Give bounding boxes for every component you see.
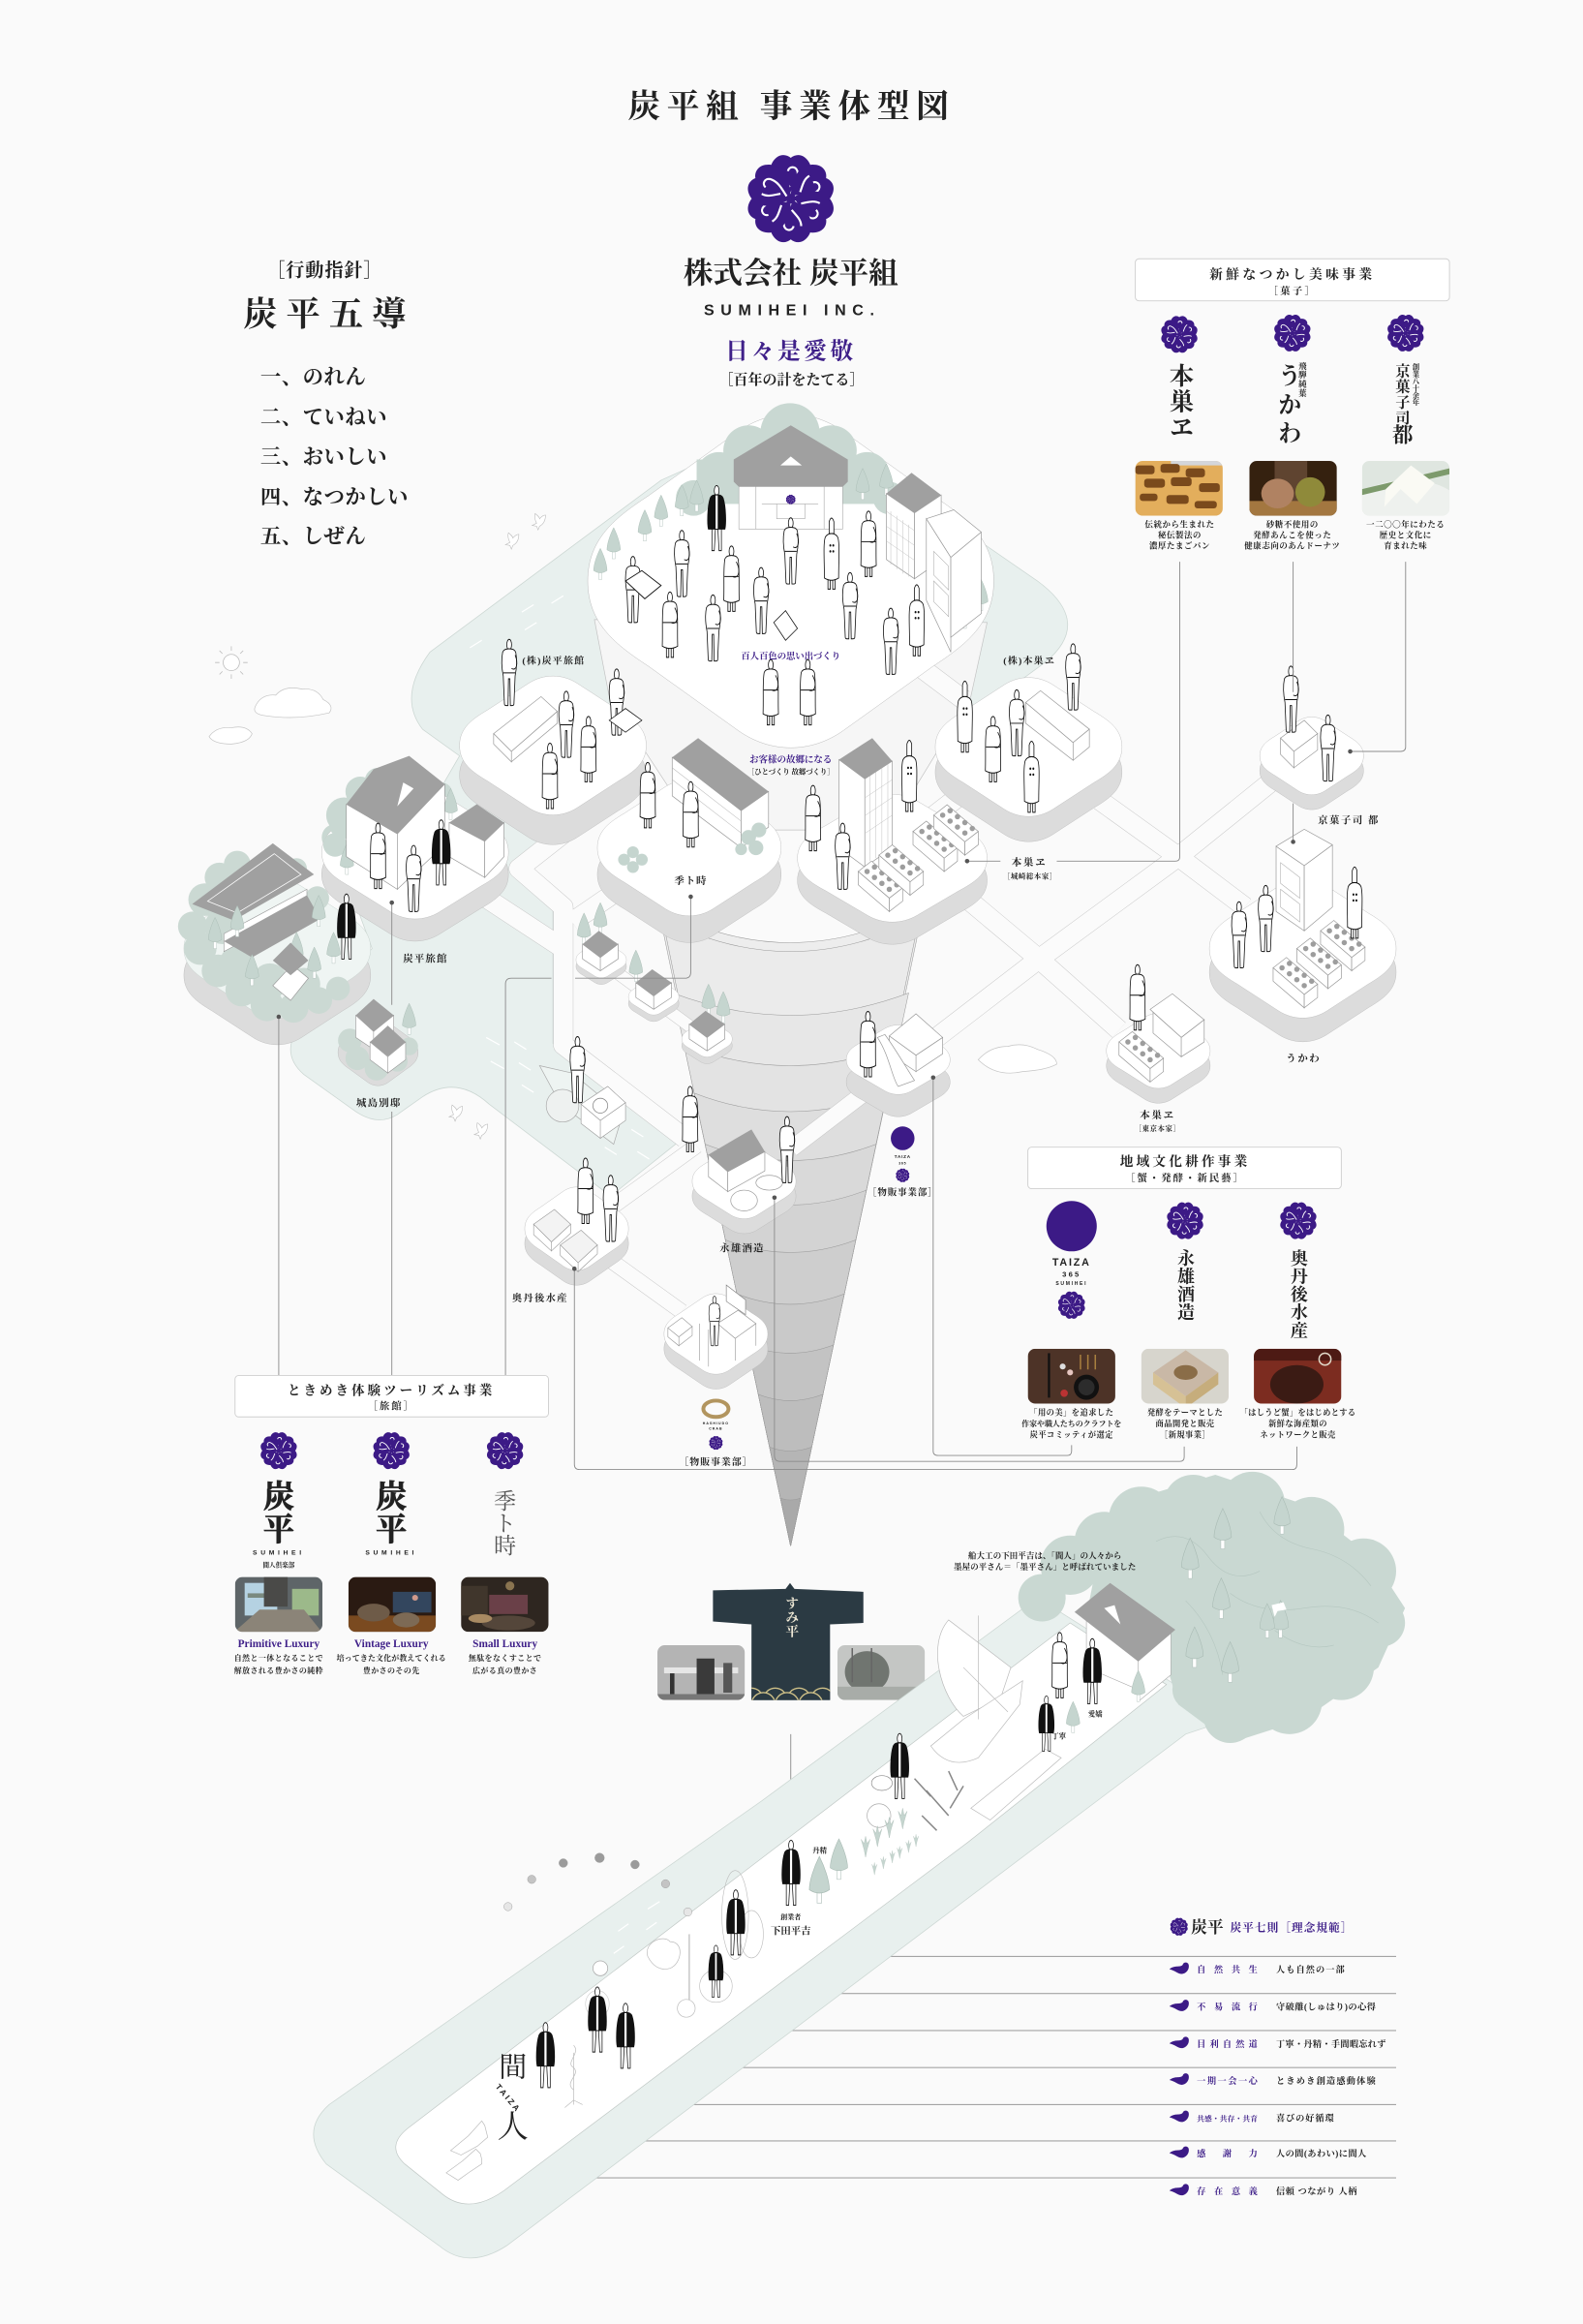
brands: tourism: 平: [263, 1512, 294, 1546]
principle rows: ときめき創造感動体験: [1276, 2075, 1377, 2086]
site labels: うかわ: [1286, 1054, 1321, 1065]
historic photos and happi coat: [657, 1583, 925, 1716]
card: tourism business header: [235, 1375, 548, 1417]
Hashiudo crab sales division logo: CRAB: [709, 1426, 723, 1430]
site labels: 京菓子司 都: [1318, 813, 1380, 826]
card: regional culture business header: 地域文化耕作事業: [1120, 1153, 1250, 1169]
site labels: 奥丹後水産: [512, 1292, 568, 1304]
captions: confectionery products: 砂糖不使用の: [1266, 520, 1319, 530]
brands: confectionery: 創業八十余年: [1412, 362, 1420, 407]
photos: confectionery products: [1135, 461, 1449, 516]
site labels: ［城崎総本家］: [1003, 872, 1057, 881]
platform: Oku-Tango Suisan: [525, 1158, 628, 1285]
captions: tourism: Primitive Luxury: [238, 1638, 320, 1650]
captions: confectionery products: 伝統から生まれた: [1144, 520, 1215, 530]
small houses along the path: [576, 902, 732, 1064]
founder's path figures and labels: [446, 1633, 1145, 2181]
platform: forest villa island: [178, 843, 371, 1045]
captions: confectionery products: 育まれた味: [1384, 541, 1427, 551]
brands: tourism: 炭: [376, 1480, 407, 1514]
site labels: ［東京本家］: [1135, 1124, 1180, 1133]
platform: Sumihei Ryokan head office: [460, 639, 647, 844]
platform: Honsue Kinosaki main store: [798, 738, 988, 944]
platform: Hashiudo online sales: [664, 1285, 768, 1389]
TAIZA sales division logo: [868, 1126, 938, 1198]
site labels: お客様の故郷になる: [749, 754, 832, 766]
captions: tourism: [234, 1638, 541, 1675]
company name block: 日々是愛敬: [725, 338, 856, 364]
founder's path figures and labels: 創業者: [780, 1912, 801, 1921]
river and water area: [290, 422, 1068, 1196]
principle rows: 共感・共存・共育: [1197, 2113, 1258, 2123]
principle rows: 一期一会一心: [1197, 2075, 1260, 2086]
principle rows: 目利自然道: [1197, 2038, 1258, 2049]
company name block: [684, 257, 898, 388]
figure walking on the road: [683, 1086, 698, 1151]
brands: tourism: 炭: [263, 1480, 294, 1514]
company emblem: [743, 155, 838, 242]
site labels: 炭平旅館: [403, 952, 448, 964]
brands: tourism: SUMIHEI: [253, 1550, 305, 1557]
platform: Kyo-gashi Tsukasa Miyako: [1260, 666, 1363, 810]
card: confectionery business header: ［菓子］: [1267, 285, 1317, 297]
Hashiudo crab sales division logo: ［物販事業部］: [679, 1455, 752, 1468]
action guidelines: ［行動指針］: [266, 260, 382, 281]
captions: confectionery products: 秘伝製法の: [1158, 531, 1202, 540]
card: regional culture business header: [1028, 1147, 1341, 1189]
captions: regional culture: 商品開発と販売: [1156, 1419, 1215, 1428]
company name block: SUMIHEI INC.: [704, 302, 881, 320]
captions: regional culture: ［新規事業］: [1160, 1429, 1210, 1439]
title: 炭平組 事業体型図: [627, 88, 956, 125]
seven principles heading: 炭平七則［理念規範］: [1231, 1920, 1354, 1934]
card: confectionery business header: 新鮮なつかし美味事業: [1209, 266, 1376, 282]
site labels: (株)本巣ヱ: [1003, 655, 1055, 667]
brands: tourism: 季: [494, 1489, 516, 1514]
principle rows: 自然共生: [1197, 1964, 1258, 1974]
captions: regional culture: 「はしうど蟹」をはじめとする: [1240, 1408, 1355, 1418]
captions: tourism: 広がる真の豊かさ: [472, 1666, 537, 1675]
founder caption: [954, 1550, 1136, 1572]
site labels: 百人百色の思い出づくり: [741, 650, 840, 661]
action guidelines: 四、なつかしい: [260, 485, 409, 508]
brands: regional culture: 奥丹後水産: [1289, 1248, 1308, 1339]
captions: confectionery products: 濃厚たまごパン: [1149, 541, 1210, 551]
captions: tourism: 解放される豊かさの純粋: [234, 1666, 323, 1675]
principle rows: 不易流行: [1197, 2002, 1258, 2012]
seven principles heading: [1170, 1917, 1354, 1937]
card: confectionery business header: [1136, 259, 1449, 301]
platform: Honsue Tokyo store: [1107, 964, 1210, 1103]
founder's path figures and labels: 人: [498, 2109, 529, 2144]
captions: tourism: Vintage Luxury: [354, 1638, 429, 1650]
captions: regional culture: 炭平コミッティが選定: [1030, 1429, 1113, 1439]
site labels: ［ひとづくり 故郷づくり］: [747, 768, 835, 777]
brands: confectionery: 都: [1389, 424, 1413, 445]
brands: confectionery: 京菓子司: [1393, 362, 1410, 426]
card: regional culture business header: ［蟹・発酵・新民藝］: [1125, 1172, 1245, 1184]
historic photos and happi coat: すみ平: [783, 1596, 799, 1638]
principle rows: 守破離(しゅはり)の心得: [1276, 2002, 1376, 2012]
brands: regional culture: 永雄酒造: [1175, 1248, 1195, 1321]
site labels: [356, 650, 1380, 1304]
action guidelines: 二、ていねい: [260, 406, 387, 429]
site labels: 本巣ヱ: [1140, 1109, 1175, 1121]
area below the head office platform: [594, 620, 988, 830]
site labels: (株)炭平旅館: [522, 655, 585, 667]
founder's path figures and labels: 丁寧: [1051, 1731, 1067, 1740]
principle rows: 存在意義: [1197, 2186, 1258, 2196]
captions: regional culture: 「用の美」を追求した: [1029, 1408, 1113, 1418]
leader lines connecting sites to business cards: [277, 562, 1406, 2178]
principle rows: 丁寧・丹精・手間暇忘れず: [1276, 2038, 1386, 2049]
principle rows: [1170, 1963, 1386, 2196]
forest and shrine at the end of the path: [1019, 1472, 1405, 1743]
clouds, sun and birds: [209, 513, 1056, 1139]
Hashiudo crab sales division logo: HASHIUDO: [703, 1422, 729, 1425]
head office buildings: [734, 425, 981, 652]
TAIZA sales division logo: ［物販事業部］: [868, 1186, 938, 1198]
wooden ship: [930, 1615, 1061, 1820]
site labels: 本巣ヱ: [1012, 856, 1048, 869]
captions: confectionery products: 発酵あんこを使った: [1253, 531, 1331, 540]
platform: Sumihei Ryokan inn: [321, 756, 508, 941]
brands: regional culture: 365: [1062, 1270, 1081, 1279]
captions: confectionery products: 一二〇〇年にわたる: [1366, 520, 1445, 530]
principle rows: 人の間(あわい)に間人: [1276, 2149, 1367, 2158]
founder's path figures and labels: TAIZA: [494, 2082, 523, 2115]
captions: confectionery products: 歴史と文化に: [1380, 531, 1432, 540]
brands: tourism: 時: [494, 1534, 516, 1558]
seven principles heading: 炭平: [1191, 1917, 1224, 1937]
TAIZA sales division logo: 365: [898, 1161, 906, 1165]
site labels: 季ト時: [674, 874, 707, 887]
platform: Kinosaki villa island: [338, 999, 418, 1086]
principle rows: 喜びの好循環: [1276, 2112, 1335, 2123]
principle rows: 人も自然の一部: [1276, 1964, 1346, 1974]
platform: Kitotoki: [597, 738, 781, 942]
brands: regional culture: [1047, 1201, 1319, 1339]
platform: TAIZA 365 shop: [846, 1011, 950, 1116]
captions: regional culture: 作家や職人たちのクラフトを: [1021, 1419, 1121, 1428]
captions: tourism: 豊かさのその先: [363, 1666, 420, 1675]
company name block: ［百年の計をたてる］: [718, 371, 865, 388]
captions: regional culture: [1021, 1408, 1355, 1439]
founder's path: teal strip and white walkway: [314, 1598, 1231, 2258]
action guidelines: 三、おいしい: [260, 445, 387, 469]
brands: tourism: ト: [494, 1512, 516, 1536]
platform: Ukawa: [1209, 829, 1396, 1042]
platform: Honsue head office: [935, 644, 1122, 841]
captions: regional culture: 発酵をテーマとした: [1147, 1408, 1223, 1418]
founder caption: 墨屋の平さん＝「墨平さん」と呼ばれていました: [954, 1562, 1136, 1572]
platform: Nagao Shuzo brewery: [692, 1116, 796, 1234]
captions: regional culture: 新鮮な海産類の: [1268, 1419, 1327, 1428]
captions: regional culture: ネットワークと販売: [1260, 1429, 1336, 1439]
brands: confectionery: うかわ: [1275, 363, 1301, 450]
brands: regional culture: SUMIHEI: [1055, 1281, 1087, 1287]
founder caption: 船大工の下田平吉は、「間人」の人々から: [968, 1550, 1121, 1560]
brands: confectionery: 本巣ヱ: [1167, 363, 1194, 440]
captions: tourism: 自然と一体となることで: [234, 1653, 323, 1663]
captions: tourism: 培ってきた文化が教えてくれる: [337, 1653, 446, 1663]
card: tourism business header: ときめき体験ツーリズム事業: [288, 1382, 495, 1397]
Hashiudo crab sales division logo: [679, 1400, 752, 1468]
action guidelines: 一、のれん: [260, 365, 366, 388]
founder's path figures and labels: 間: [499, 2052, 527, 2083]
brands: confectionery: [1159, 315, 1426, 450]
photos: regional culture: [1028, 1349, 1341, 1408]
brands: tourism: 平: [376, 1512, 407, 1546]
panel: seven principles: [1170, 1917, 1386, 2196]
photos: tourism: [234, 1577, 548, 1632]
action guidelines: 五、しぜん: [260, 525, 366, 548]
card: tourism business header: ［旅館］: [367, 1400, 415, 1413]
action guidelines: [243, 260, 415, 548]
brands: tourism: [253, 1432, 526, 1570]
action guidelines: 炭平五導: [243, 296, 415, 334]
founder's path figures and labels: 丹精: [812, 1846, 828, 1854]
platform: head office forest and ground: [588, 403, 993, 748]
captions: confectionery products: 健康志向のあんドーナツ: [1244, 541, 1340, 551]
company name block: 株式会社 炭平組: [684, 257, 898, 290]
principle rows: 信頼 つながり 人柄: [1276, 2186, 1357, 2196]
head office staff figures: [625, 485, 925, 725]
founder's path figures and labels: 愛嬌: [1088, 1709, 1103, 1718]
captions: tourism: 無駄をなくすことで: [469, 1653, 541, 1663]
founder's path figures and labels: 下田平吉: [771, 1924, 811, 1937]
road network: [469, 664, 1270, 1312]
brands: tourism: SUMIHEI: [365, 1550, 417, 1557]
brands: tourism: 間人倶楽部: [262, 1561, 295, 1570]
central tapering cone: [658, 907, 924, 1545]
captions: tourism: Small Luxury: [472, 1638, 537, 1650]
brands: confectionery: 飛騨純葉: [1297, 361, 1308, 398]
captions: confectionery products: [1144, 520, 1445, 551]
site labels: 城島別邸: [356, 1097, 401, 1110]
brands: regional culture: TAIZA: [1052, 1257, 1091, 1269]
TAIZA sales division logo: TAIZA: [895, 1154, 911, 1159]
fishing boat scene on the river: [539, 1037, 625, 1145]
principle rows: 感謝力: [1197, 2148, 1258, 2158]
site labels: 永雄酒造: [719, 1242, 765, 1255]
